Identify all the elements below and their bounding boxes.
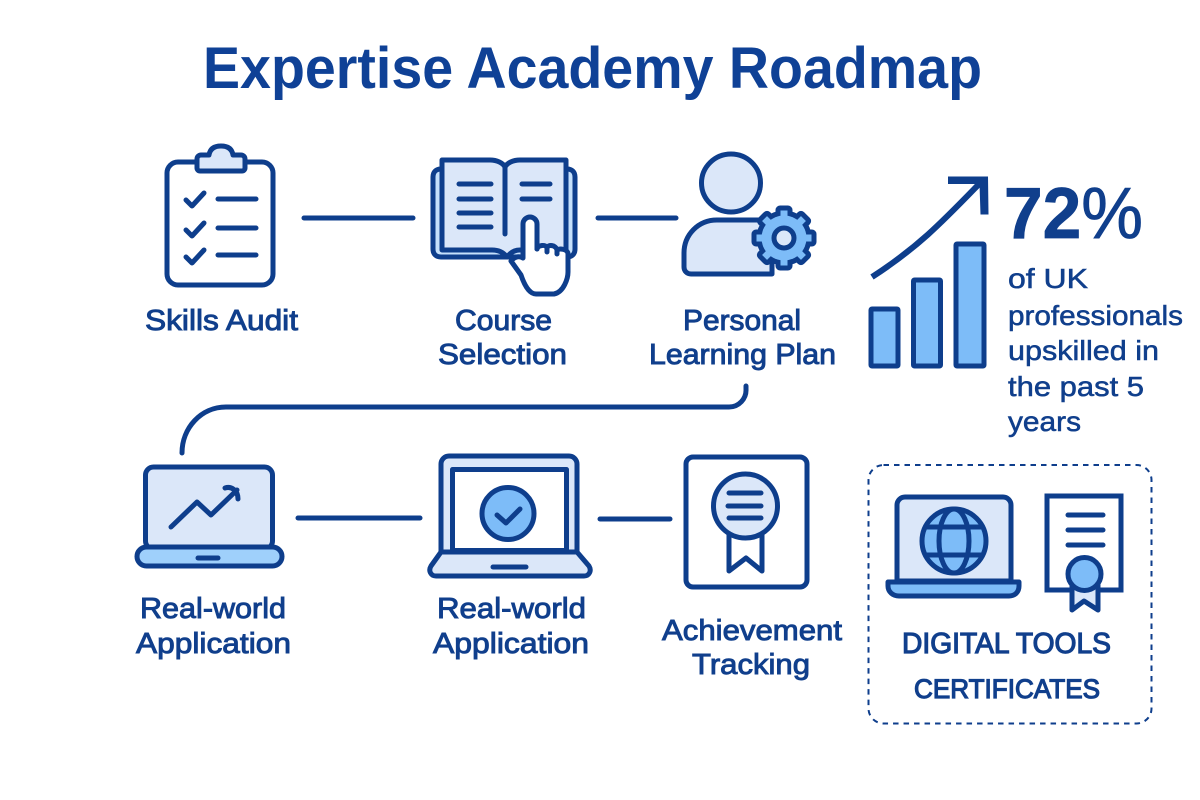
label: digital tools: DIGITAL TOOLS: [902, 628, 1111, 660]
title: Expertise Academy Roadmap: [203, 36, 982, 101]
icon: personal learning plan person with gear: [684, 154, 814, 274]
label: achievement tracking: [662, 615, 842, 681]
stat description: [1008, 263, 1183, 437]
label: certificates: CERTIFICATES: [914, 674, 1100, 704]
label: real-world application 1: Application: [136, 628, 291, 660]
connector: laptop to achievement: [600, 516, 670, 522]
stat description: years: [1008, 406, 1081, 437]
label: achievement tracking: Tracking: [692, 649, 810, 681]
icon: skills audit clipboard: [167, 146, 273, 285]
connector: course to plan: [598, 216, 676, 220]
icon: real-world application laptop with chart: [137, 467, 282, 566]
label: real-world application 2: [433, 593, 589, 660]
label: course selection: Course: [455, 305, 552, 337]
label: achievement tracking: Achievement: [662, 615, 842, 647]
stat description: professionals: [1008, 300, 1183, 331]
stat: 72 percent: 72%: [1004, 174, 1143, 254]
stat description: of UK: [1008, 263, 1088, 294]
label: personal learning plan: Personal: [683, 305, 801, 337]
chart: rising bars with arrow: [871, 176, 988, 366]
icon: certificate with seal: [1047, 496, 1121, 610]
label: course selection: Selection: [438, 339, 567, 371]
stat description: upskilled in: [1008, 335, 1159, 366]
icon: real-world application laptop with check: [430, 456, 590, 576]
label: course selection: [438, 305, 567, 371]
stat description: the past 5: [1008, 371, 1144, 402]
label: real-world application 1: [136, 593, 291, 660]
icon: achievement tracking medal: [686, 457, 807, 587]
label: real-world application 1: Real-world: [140, 593, 286, 625]
label: personal learning plan: [649, 305, 836, 371]
connector: laptop to laptop: [298, 516, 420, 520]
label: real-world application 2: Application: [433, 628, 589, 660]
label: skills audit: Skills Audit: [145, 305, 298, 337]
icon: course selection book: [433, 160, 575, 294]
label: real-world application 2: Real-world: [437, 593, 586, 625]
connector: audit to course: [304, 216, 413, 220]
connector: plan down to second row: [182, 386, 746, 453]
panel: digital tools and certificates: [868, 465, 1152, 724]
label: personal learning plan: Learning Plan: [649, 339, 836, 371]
icon: laptop with globe: [888, 497, 1019, 596]
icon detail: pointing hand: [511, 217, 568, 294]
